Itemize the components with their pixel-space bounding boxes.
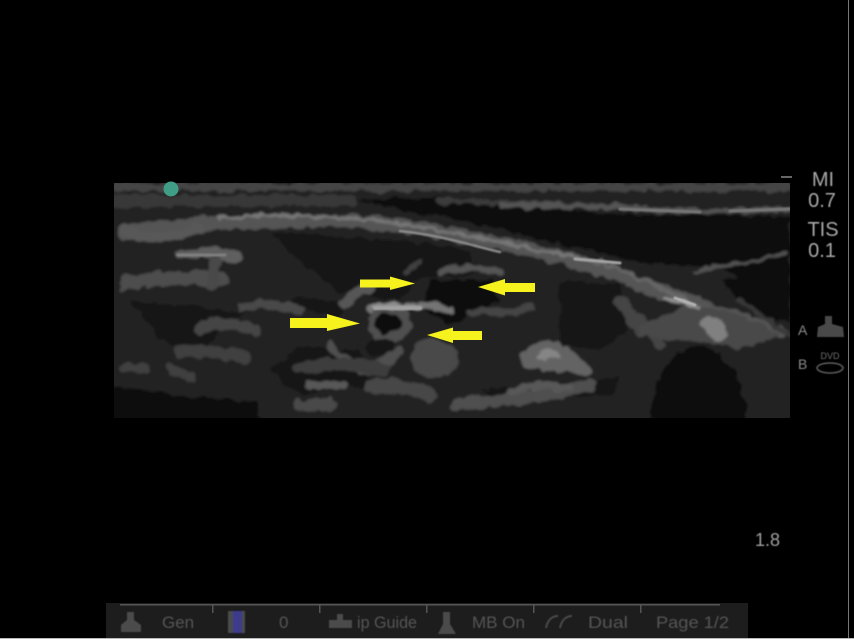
control: MB On [438, 612, 525, 634]
bright fascia highlights [178, 209, 790, 308]
control: MB On: MB On [472, 613, 525, 632]
control: Page 1/2: Page 1/2 [656, 613, 729, 632]
focus marker A with icon: A [798, 322, 808, 338]
dark hypoechoic patches [105, 197, 790, 425]
control: Dual [546, 613, 628, 632]
control: Gen [121, 612, 194, 632]
focus marker B with icon [798, 351, 843, 373]
bottom control bar [106, 603, 748, 638]
readout: TIS [807, 219, 839, 262]
focus marker B with icon: DVD [820, 351, 840, 361]
readout: TIS: 0.1 [808, 240, 836, 262]
control: Clip Guide: ip Guide [357, 613, 417, 632]
echogenic tissue bands [114, 187, 790, 405]
focus marker A with icon [798, 316, 844, 338]
control: gain 0: 0 [279, 613, 288, 632]
control: gain 0 [228, 611, 288, 633]
base tissue [105, 178, 800, 425]
readout: TIS: TIS [807, 219, 839, 241]
readout: MI: MI [812, 169, 834, 191]
control: Dual: Dual [588, 613, 628, 632]
control: Clip Guide [329, 613, 417, 632]
yellow arrow 3 [427, 328, 482, 343]
yellow arrow 2 [290, 314, 360, 331]
bright echogenic patches [411, 298, 780, 378]
control: Gen: Gen [162, 613, 194, 632]
depth value: 1.8 [755, 530, 780, 550]
ultrasound scan image [105, 178, 800, 425]
orientation marker dot [164, 182, 178, 196]
depth tick [781, 176, 792, 178]
focus marker B with icon: B [798, 356, 807, 372]
readout: MI: 0.7 [808, 190, 836, 212]
yellow arrow 1 [360, 276, 415, 290]
yellow arrow 4 [478, 279, 535, 296]
vessels [366, 300, 416, 356]
readout: MI [808, 169, 836, 212]
